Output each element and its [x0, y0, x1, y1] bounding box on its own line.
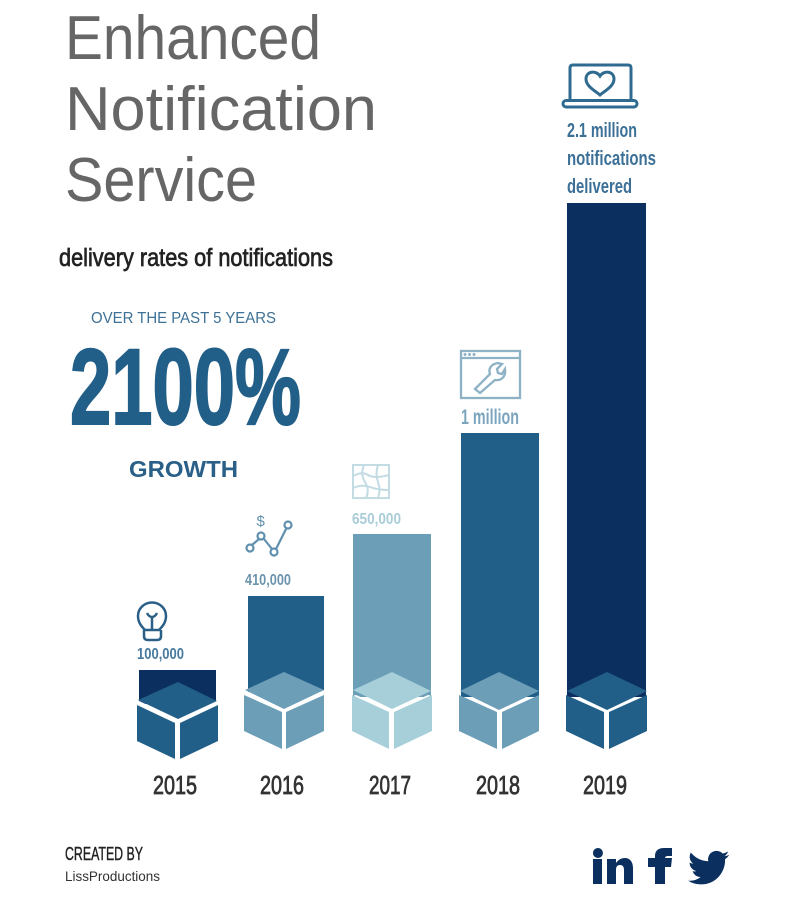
- icon: dollar trend line: $: [256, 513, 266, 530]
- title: Service: [65, 146, 257, 215]
- value 2019: 2.1 million: [567, 120, 637, 142]
- year labels: 2018: [476, 770, 520, 800]
- cube 2017: [352, 672, 432, 749]
- icon: dollar trend line: [246, 513, 292, 556]
- credit name: LissProductions: [65, 868, 160, 884]
- bar 2016: [244, 596, 324, 749]
- value 2018: 1 million: [461, 406, 519, 429]
- icon: light bulb: [138, 602, 166, 640]
- growth callout: [70, 310, 301, 482]
- bar 2019: [566, 203, 647, 749]
- credit heading: CREATED BY: [65, 844, 143, 864]
- icon: laptop heart: [563, 65, 637, 107]
- cube 2015: [137, 682, 218, 759]
- cube 2019: [566, 672, 647, 749]
- value 2016: 410,000: [245, 572, 291, 589]
- credit: [65, 844, 160, 884]
- bar 2015: [137, 670, 218, 759]
- value 2019: notifications: [567, 148, 656, 170]
- cube 2016: [244, 672, 324, 749]
- growth label: GROWTH: [129, 456, 238, 482]
- title: Notification: [65, 75, 377, 144]
- callout lead-in: OVER THE PAST 5 YEARS: [91, 310, 276, 327]
- value 2017: 650,000: [352, 511, 401, 528]
- bar 2017: [352, 534, 432, 749]
- icon: warped grid: [353, 465, 389, 498]
- icon: linkedin: [593, 848, 633, 884]
- value 2019: delivered: [567, 176, 632, 198]
- cube 2018: [459, 672, 539, 749]
- bar 2018: [459, 433, 539, 749]
- year labels: 2015: [153, 770, 197, 800]
- growth percentage: 2100%: [70, 326, 301, 447]
- icon: browser wrench: [461, 351, 520, 398]
- title: Enhanced: [65, 4, 321, 73]
- icon: facebook: [648, 848, 672, 884]
- title: [65, 4, 377, 215]
- year labels: 2017: [369, 770, 411, 800]
- value 2015: 100,000: [137, 646, 184, 663]
- value 2019: [567, 120, 656, 198]
- social icons: [593, 848, 729, 884]
- icon: twitter: [688, 851, 729, 884]
- subtitle: delivery rates of notifications: [59, 244, 333, 272]
- year labels: [153, 770, 627, 800]
- year labels: 2016: [260, 770, 304, 800]
- year labels: 2019: [583, 770, 627, 800]
